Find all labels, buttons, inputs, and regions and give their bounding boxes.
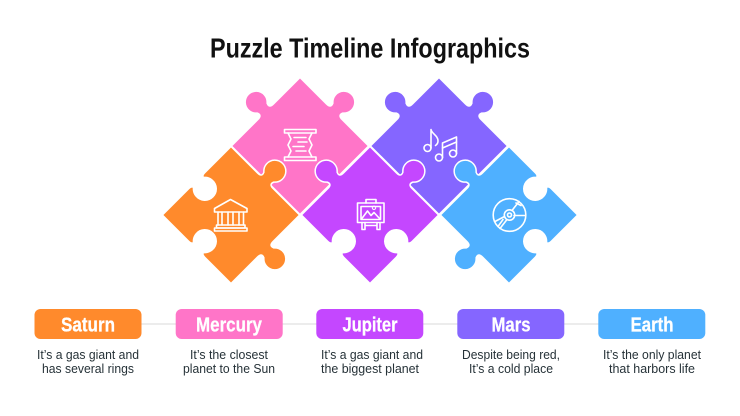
description: Saturn: It’s a gas giant and <box>37 348 139 362</box>
description: Earth: It’s the only planet <box>603 348 702 362</box>
timeline step: Mars <box>457 309 564 376</box>
label box: Jupiter <box>316 309 423 339</box>
description: Mercury <box>183 348 275 376</box>
label box: Saturn <box>34 309 142 339</box>
icon: scroll <box>284 130 316 160</box>
label box: Mercury <box>176 309 283 339</box>
description: Mars: Despite being red, <box>462 348 560 362</box>
description: Mercury: It’s the closest <box>190 348 269 362</box>
description: Jupiter: the biggest planet <box>321 362 420 376</box>
description: Saturn <box>37 348 139 376</box>
icon: bank building <box>214 200 247 231</box>
icon: presentation easel <box>358 200 384 230</box>
puzzle piece: orange <box>162 129 334 301</box>
description: Jupiter: It’s a gas giant and <box>321 348 423 362</box>
timeline connectors <box>141 323 599 325</box>
description: Saturn: has several rings <box>42 362 134 376</box>
icon: compact disc <box>493 199 526 231</box>
puzzle diagram <box>162 43 578 301</box>
description: Mercury: planet to the Sun <box>183 362 275 376</box>
title: Puzzle Timeline Infographics <box>210 32 530 64</box>
timeline step: Earth <box>598 309 705 376</box>
timeline step: Saturn <box>34 309 142 376</box>
heading: Saturn: Saturn <box>61 314 115 336</box>
label box: Earth <box>598 309 705 339</box>
heading: Mars: Mars <box>492 314 530 336</box>
timeline step: Mercury <box>176 309 283 376</box>
puzzle piece: blue <box>406 129 578 301</box>
heading: Earth: Earth <box>630 314 674 336</box>
description: Mars: It’s a cold place <box>469 362 553 376</box>
description: Mars <box>462 348 560 376</box>
timeline step: Jupiter <box>316 309 423 376</box>
puzzle piece: pink <box>214 43 386 215</box>
icon: music notes <box>424 130 456 161</box>
description: Earth: that harbors life <box>609 362 695 376</box>
heading: Jupiter: Jupiter <box>342 314 398 336</box>
puzzle piece: purple <box>284 112 456 284</box>
heading: Mercury: Mercury <box>196 314 262 336</box>
puzzle piece: violet <box>353 43 525 215</box>
label box: Mars <box>457 309 564 339</box>
description: Earth <box>603 348 702 376</box>
description: Jupiter <box>321 348 423 376</box>
